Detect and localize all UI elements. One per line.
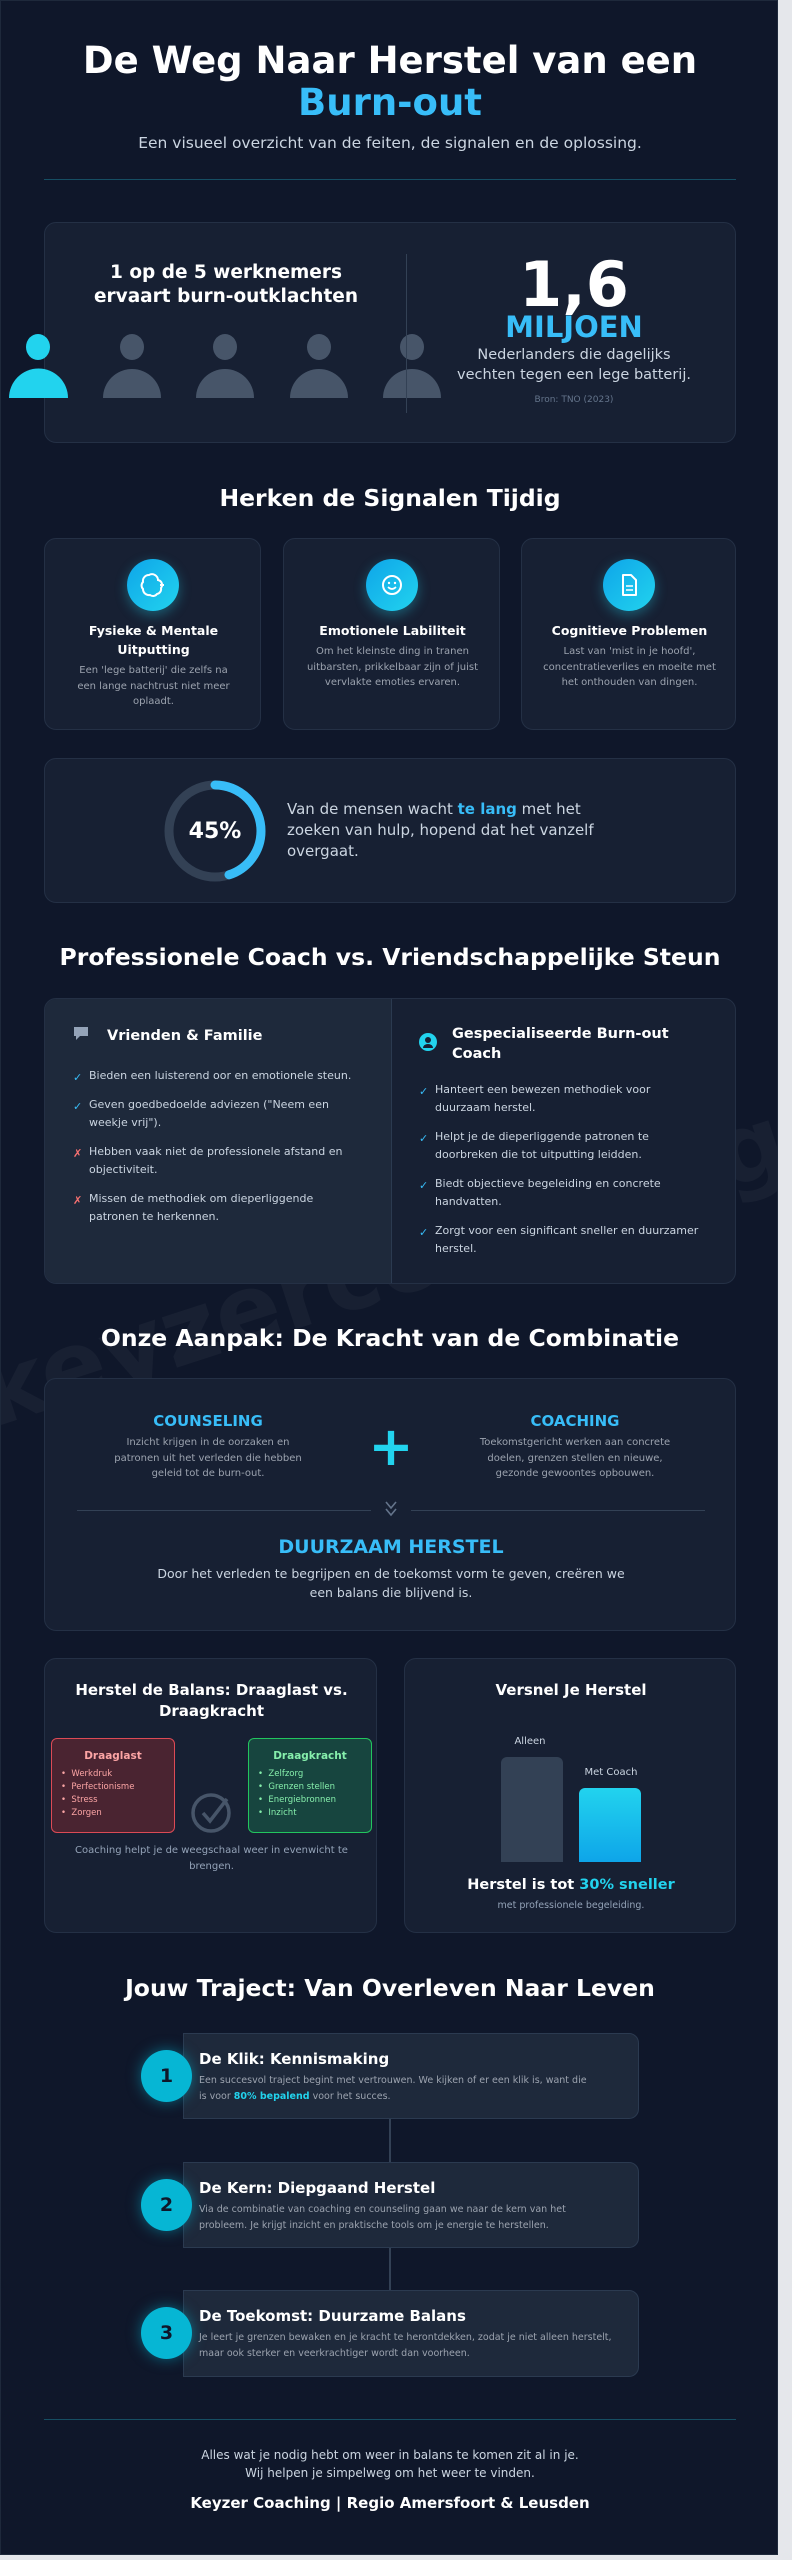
footer brand: Keyzer Coaching | Regio Amersfoort & Leusden [190, 2494, 590, 2512]
column: vrienden: ✗ [73, 1194, 82, 1207]
block: counseling: Inzicht krijgen in de oorzaken en patronen uit het verleden die hebben geleid tot de burn-out. [114, 1437, 302, 1479]
box: draaglast [51, 1738, 175, 1833]
heading: traject: Jouw Traject: Van Overleven Naar Leven [125, 1974, 655, 2002]
column: coach: Zorgt voor een significant sneller en duurzamer herstel. [435, 1224, 698, 1255]
box: draagkracht: • Zelfzorg [258, 1769, 303, 1779]
panel: versnel: Herstel is tot 30% sneller [467, 1877, 675, 1893]
block: counseling [114, 1412, 302, 1479]
stat text: 1 op de 5: ervaart burn-outklachten [94, 286, 358, 307]
block: coaching [480, 1412, 670, 1479]
box: draagkracht: • Inzicht [258, 1808, 297, 1818]
panel: signal 1 [44, 538, 261, 730]
title: De Weg Naar Herstel van een [83, 39, 697, 82]
icon: person badge [419, 1033, 437, 1051]
panel: balans: Coaching helpt je de weegschaal weer in evenwicht te brengen. [75, 1845, 348, 1872]
box: draaglast: • Stress [61, 1795, 98, 1805]
block: coaching: Toekomstgericht werken aan concrete doelen, grenzen stellen en nieuwe, gezonde gewoontes opbouwen. [480, 1437, 670, 1479]
icon: brain [127, 559, 179, 611]
panel: versnel: met professionele begeleiding. [498, 1900, 644, 1911]
step 3: De Toekomst: Duurzame Balans [199, 2307, 466, 2325]
box: draaglast: Draaglast [84, 1750, 142, 1762]
box: draaglast: • Perfectionisme [61, 1782, 134, 1792]
result: duurzaam herstel: DUURZAAM HERSTEL [278, 1536, 504, 1558]
stat: 1,6 miljoen: Nederlanders die dagelijks [477, 347, 671, 363]
icon: plus: + [368, 1415, 414, 1478]
step 3: Je leert je grenzen bewaken en je kracht te herontdekken, zodat je niet alleen herstelt, maar ook sterker en veerkrachtiger wordt dan voorheen. [199, 2332, 612, 2358]
step 3: 3 [160, 2322, 173, 2344]
panel: signal 3 [521, 538, 736, 730]
step 1: Een succesvol traject begint met vertrouwen. We kijken of er een klik is, want die [199, 2075, 587, 2086]
column: coach: Biedt objectieve begeleiding en concrete handvatten. [435, 1177, 661, 1208]
column: coach: ✓ [419, 1085, 428, 1098]
column: vrienden: ✓ [73, 1100, 82, 1113]
icon: document [603, 559, 655, 611]
panel: balans: Draagkracht [159, 1702, 264, 1720]
icon: smile [366, 559, 418, 611]
icon: scale check [191, 1793, 231, 1833]
footer text: Alles wat je nodig hebt om weer in balans te komen zit al in je. [201, 2448, 579, 2462]
column: vrienden [45, 999, 392, 1285]
chart: donut 45%: 45% [189, 819, 241, 844]
bar chart: Met Coach [585, 1767, 637, 1778]
panel: balans: Herstel de Balans: Draaglast vs. [75, 1681, 348, 1699]
column: vrienden: Geven goedbedoelde adviezen ("Neem een weekje vrij"). [89, 1098, 329, 1129]
stat text: 1 op de 5 [94, 262, 358, 307]
panel: combination [44, 1378, 736, 1631]
bar chart [501, 1736, 641, 1862]
step 2: 2 [160, 2194, 173, 2216]
heading: comparison: Professionele Coach vs. Vriendschappelijke Steun [60, 943, 720, 971]
panel: signal 1: Uitputting [117, 642, 190, 657]
panel: 45% [44, 758, 736, 903]
stat: 1,6 miljoen [457, 248, 691, 405]
box: draaglast: • Zorgen [61, 1808, 102, 1818]
footer text [201, 2448, 579, 2480]
column: vrienden: Missen de methodiek om dieperliggende patronen te herkennen. [89, 1192, 313, 1223]
step 3 [134, 2290, 639, 2377]
step 1: is voor 80% bepalend voor het succes. [199, 2090, 391, 2102]
heading: aanpak: Onze Aanpak: De Kracht van de Combinatie [101, 1324, 679, 1352]
stat: 1,6 miljoen: 1,6 [519, 248, 629, 321]
footer text: Wij helpen je simpelweg om het weer te vinden. [245, 2466, 535, 2480]
panel: signal 2 [283, 538, 500, 730]
column: vrienden: ✗ [73, 1147, 82, 1160]
block: counseling: COUNSELING [153, 1412, 263, 1430]
heading: signalen: Herken de Signalen Tijdig [219, 484, 561, 512]
panel: signal 3: Last van 'mist in je hoofd', concentratieverlies en moeite met het onthouden van dingen. [543, 646, 716, 688]
stat text: 1 op de 5: 1 op de 5 werknemers [110, 262, 342, 283]
panel: signal 1: Een 'lege batterij' die zelfs na een lange nachtrust niet meer oplaadt. [77, 665, 230, 707]
stat: 1,6 miljoen: Bron: TNO (2023) [535, 395, 613, 405]
step 1: 1 [160, 2065, 173, 2087]
result: duurzaam herstel [157, 1536, 625, 1600]
panel: signal 1: Fysieke & Mentale [89, 623, 218, 638]
panel: balans [44, 1658, 377, 1933]
step 2: Via de combinatie van coaching en counseling gaan we naar de kern van het probleem. Je krijgt inzicht en praktische tools om je energie te herstellen. [199, 2204, 566, 2230]
column: vrienden: Vrienden & Familie [107, 1028, 262, 1044]
title: Burn-out [298, 81, 482, 124]
box: draaglast: • Werkdruk [61, 1769, 112, 1779]
icon: chat [74, 1027, 88, 1040]
panel: signal 2: Emotionele Labiliteit [319, 623, 466, 638]
box: draagkracht: • Grenzen stellen [258, 1782, 335, 1792]
panel: signal 2: Om het kleinste ding in tranen uitbarsten, prikkelbaar zijn of juist vervlakte emoties ervaren. [307, 646, 478, 688]
box: draagkracht: • Energiebronnen [258, 1795, 336, 1805]
icon: chevrons down [386, 1502, 396, 1516]
column: coach [419, 1026, 698, 1255]
step 2: De Kern: Diepgaand Herstel [199, 2179, 435, 2197]
box: draagkracht: Draagkracht [273, 1750, 347, 1762]
panel: versnel: Versnel Je Herstel [495, 1681, 647, 1699]
panel: comparison [44, 998, 736, 1284]
panel: signal 3: Cognitieve Problemen [552, 623, 707, 638]
block: coaching: COACHING [530, 1412, 619, 1430]
stat: 1,6 miljoen: vechten tegen een lege batterij. [457, 367, 691, 383]
column: coach: ✓ [419, 1179, 428, 1192]
column: coach: Hanteert een bewezen methodiek voor duurzaam herstel. [435, 1083, 650, 1114]
subtitle: Een visueel overzicht van de feiten, de signalen en de oplossing. [138, 134, 642, 152]
icon: people row [9, 334, 441, 398]
column: coach: Gespecialiseerde Burn-out Coach [452, 1026, 669, 1062]
column: coach: Helpt je de dieperliggende patronen te doorbreken die tot uitputting leidden. [435, 1130, 649, 1161]
column: vrienden: ✓ [73, 1071, 82, 1084]
result: duurzaam herstel: Door het verleden te begrijpen en de toekomst vorm te geven, creëren we [157, 1566, 625, 1581]
panel: versnel [404, 1658, 736, 1933]
column: coach: ✓ [419, 1226, 428, 1239]
box: draagkracht [248, 1738, 372, 1833]
column: vrienden: Hebben vaak niet de professionele afstand en objectiviteit. [89, 1145, 342, 1176]
chart: donut 45% [164, 780, 266, 882]
stat: 1,6 miljoen: MILJOEN [505, 310, 643, 344]
column: vrienden: Bieden een luisterend oor en emotionele steun. [89, 1069, 351, 1082]
column: coach: ✓ [419, 1132, 428, 1145]
step 1 [134, 2033, 639, 2119]
bar chart: Alleen [514, 1736, 546, 1747]
panel: stats [44, 222, 736, 443]
title [83, 39, 697, 124]
result: duurzaam herstel: een balans die blijvend is. [310, 1585, 472, 1600]
step 2 [134, 2162, 639, 2248]
step 1: De Klik: Kennismaking [199, 2050, 389, 2068]
panel: 45%: Van de mensen wacht te lang met het zoeken van hulp, hopend dat het vanzelf overgaat. [287, 800, 594, 860]
